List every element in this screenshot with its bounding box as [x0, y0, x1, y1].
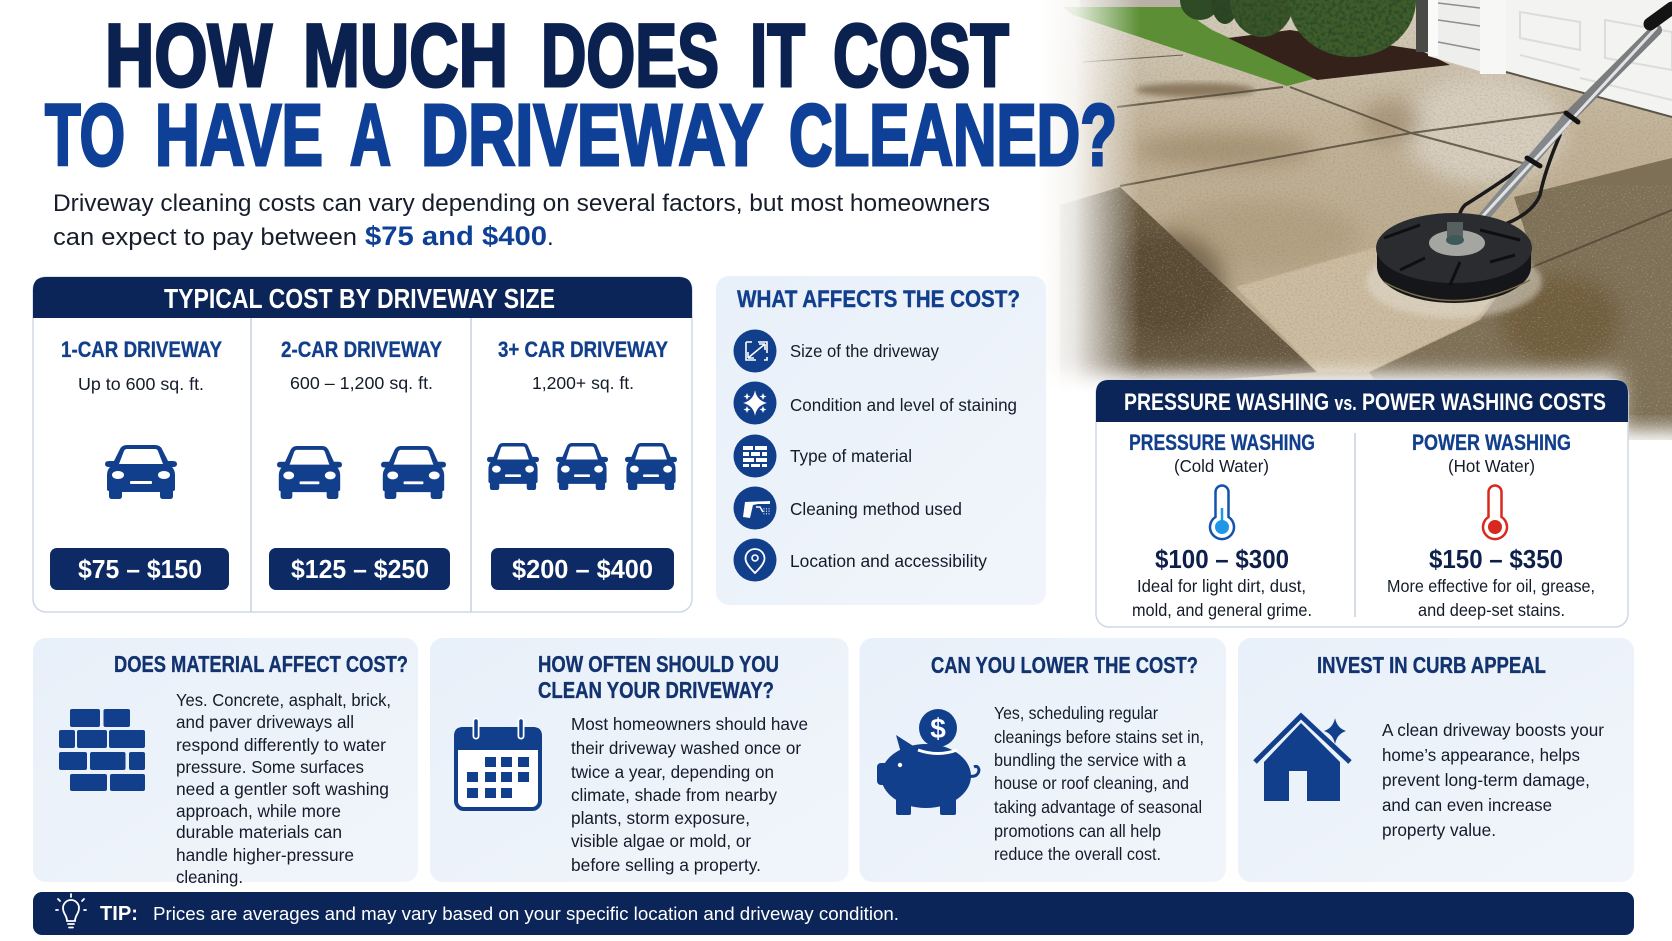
tip text: Prices are averages and may vary based on your specific location and driveway condition.	[153, 903, 899, 924]
body text: taking advantage of seasonal	[994, 797, 1202, 817]
body text: Yes. Concrete, asphalt, brick,	[176, 690, 391, 710]
concrete surface	[1040, 0, 1672, 440]
panel heading: WHAT AFFECTS THE COST?	[737, 286, 1020, 313]
panel: can you lower the cost	[860, 638, 1226, 882]
icon: cold thermometer	[1210, 486, 1234, 539]
factor: size	[734, 330, 939, 372]
strip beyond the lawn	[1080, 0, 1280, 7]
photo: surface cleaner on a driveway	[1055, 0, 1672, 440]
intro text: .	[547, 224, 554, 251]
tip bar	[33, 892, 1634, 935]
body text: promotions can all help	[994, 821, 1161, 841]
body text: house or roof cleaning, and	[994, 773, 1189, 793]
factor: condition	[734, 382, 1017, 424]
panel heading: PRESSURE WASHING vs. POWER WASHING COSTS	[1124, 389, 1606, 416]
column: power washing: POWER WASHING	[1412, 430, 1571, 455]
panel: what affects the cost	[716, 276, 1046, 605]
body text: plants, storm exposure,	[571, 808, 750, 828]
body text: need a gentler soft washing	[176, 779, 389, 799]
body text	[176, 690, 391, 887]
title line 2: CLEANED?	[789, 87, 1117, 184]
heading: HOW OFTEN SHOULD YOU	[538, 651, 779, 677]
icon: two cars	[277, 446, 446, 499]
body text: climate, shade from nearby	[571, 785, 777, 805]
title line 1	[105, 5, 1009, 105]
title line 2: TO	[45, 87, 125, 184]
dark wet concrete, right	[1369, 158, 1672, 440]
title line 2: HAVE	[155, 87, 323, 184]
title line 2: A	[350, 87, 391, 184]
body text: and paver driveways all	[176, 712, 354, 732]
heading: CLEAN YOUR DRIVEWAY?	[538, 677, 774, 703]
title line 1: HOW	[105, 5, 272, 105]
icon: three cars	[487, 443, 677, 490]
mulch bed	[1228, 30, 1450, 80]
body text: home’s appearance, helps	[1382, 745, 1580, 765]
body text: pressure. Some surfaces	[176, 757, 364, 777]
column: 2-car driveway: 2-CAR DRIVEWAY	[281, 337, 442, 362]
factor: material	[734, 434, 912, 478]
column: power washing: and deep-set stains.	[1418, 600, 1565, 620]
body text: bundling the service with a	[994, 750, 1186, 770]
body text: their driveway washed once or	[571, 738, 801, 758]
column: 3+ car driveway: 1,200+ sq. ft.	[532, 373, 634, 393]
panel: pressure vs power washing	[1096, 380, 1628, 627]
body text: Most homeowners should have	[571, 714, 808, 734]
body text: respond differently to water	[176, 735, 386, 755]
surface cleaner disc	[1366, 213, 1542, 318]
heading: INVEST IN CURB APPEAL	[1317, 652, 1546, 678]
title	[45, 5, 1117, 184]
body text	[1382, 720, 1604, 840]
column: pressure washing	[1129, 430, 1315, 620]
column: power washing: (Hot Water)	[1448, 456, 1535, 476]
title line 1: COST	[833, 5, 1009, 105]
body text: durable materials can	[176, 822, 342, 842]
column: 2-car driveway: $125 – $250	[291, 554, 429, 584]
column: 3+ car driveway	[487, 337, 677, 590]
icon: piggy bank: $	[930, 713, 946, 744]
column: power washing: $150 – $350	[1429, 544, 1563, 574]
column: 1-car driveway: $75 – $150	[78, 554, 202, 584]
icon: car	[105, 445, 177, 499]
column: 1-car driveway	[50, 337, 229, 590]
column: pressure washing: (Cold Water)	[1174, 456, 1269, 476]
body text: property value.	[1382, 820, 1496, 840]
freshly cleaned strip	[1236, 247, 1531, 372]
body text: visible algae or mold, or	[571, 831, 751, 851]
body text: before selling a property.	[571, 855, 761, 875]
body text: and can even increase	[1382, 795, 1552, 815]
factor: location	[734, 538, 987, 582]
factor: location: Location and accessibility	[790, 551, 987, 571]
title line 1: IT	[750, 5, 805, 105]
panel: invest in curb appeal	[1238, 638, 1634, 882]
heading	[538, 651, 779, 703]
intro text: can expect to pay between	[53, 224, 357, 251]
panel: typical cost by driveway size	[33, 277, 692, 612]
icon: bricks	[59, 709, 145, 791]
column: power washing	[1387, 430, 1595, 620]
title line 2	[45, 87, 1117, 184]
column: 3+ car driveway: $200 – $400	[512, 554, 653, 584]
column: 3+ car driveway: 3+ CAR DRIVEWAY	[498, 337, 668, 362]
intro text: Driveway cleaning costs can vary depending on several factors, but most homeowners	[53, 190, 990, 217]
column: pressure washing: Ideal for light dirt, dust,	[1137, 576, 1306, 596]
body text: Yes, scheduling regular	[994, 703, 1158, 723]
column: pressure washing: PRESSURE WASHING	[1129, 430, 1315, 455]
heading: CAN YOU LOWER THE COST?	[931, 652, 1198, 678]
photo fades	[1040, 0, 1140, 400]
panel heading: TYPICAL COST BY DRIVEWAY SIZE	[164, 283, 555, 314]
factor: condition: Condition and level of staining	[790, 395, 1017, 415]
body text: reduce the overall cost.	[994, 844, 1161, 864]
panel: does material affect cost	[33, 638, 418, 887]
dark wet concrete, left	[1060, 187, 1317, 392]
factor: cleaning method: Cleaning method used	[790, 499, 962, 519]
body text: prevent long-term damage,	[1382, 770, 1590, 790]
column: 2-car driveway	[269, 337, 450, 590]
body text	[571, 714, 808, 875]
factor: size: Size of the driveway	[790, 341, 939, 361]
factor: cleaning method	[734, 486, 962, 530]
icon: hot thermometer	[1483, 486, 1507, 539]
body text: twice a year, depending on	[571, 762, 774, 782]
house siding and garage door	[1416, 0, 1672, 117]
body text	[994, 703, 1204, 864]
icon: house with sparkle	[1255, 716, 1350, 801]
panel: how often should you clean	[430, 638, 848, 882]
column: power washing: More effective for oil, grease,	[1387, 576, 1595, 596]
expansion joints	[1083, 55, 1672, 268]
body text: handle higher-pressure	[176, 845, 354, 865]
shrubs	[1180, 0, 1416, 57]
column: 2-car driveway: 600 – 1,200 sq. ft.	[290, 373, 433, 393]
title line 1: MUCH	[303, 5, 508, 105]
icon: calendar	[454, 721, 542, 809]
icon: light bulb	[56, 894, 86, 928]
pressure wand and hoses	[1455, 8, 1672, 232]
factor: material: Type of material	[790, 446, 912, 466]
body text: cleanings before stains set in,	[994, 727, 1204, 747]
column: pressure washing: mold, and general grime.	[1132, 600, 1312, 620]
column: 1-car driveway: 1-CAR DRIVEWAY	[61, 337, 222, 362]
title line 2: DRIVEWAY	[421, 87, 763, 184]
icon: piggy bank	[877, 709, 979, 815]
column: pressure washing: $100 – $300	[1155, 544, 1289, 574]
tip label: TIP:	[100, 903, 138, 925]
price range highlight: $75 and $400	[365, 221, 547, 251]
body text: cleaning.	[176, 867, 243, 887]
lawn	[1063, 7, 1317, 86]
column: 1-car driveway: Up to 600 sq. ft.	[78, 374, 204, 394]
heading: DOES MATERIAL AFFECT COST?	[114, 651, 408, 677]
title line 1: DOES	[541, 5, 719, 105]
intro text	[53, 190, 990, 251]
body text: approach, while more	[176, 801, 341, 821]
body text: A clean driveway boosts your	[1382, 720, 1604, 740]
